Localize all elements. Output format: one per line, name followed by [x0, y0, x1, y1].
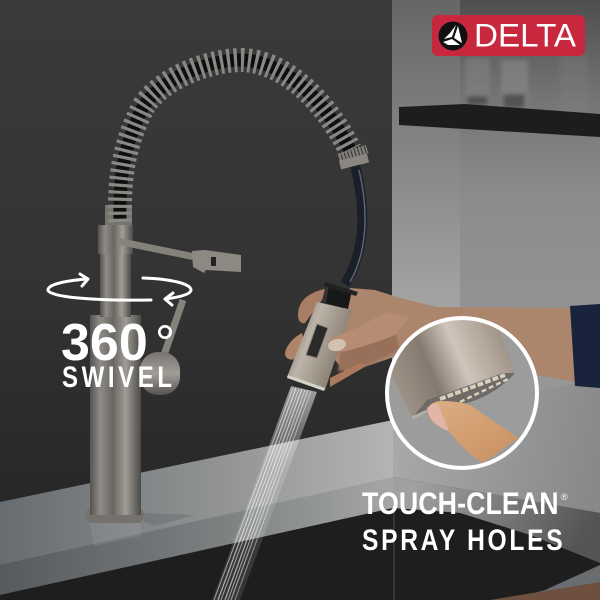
- pull-down spray head: [287, 282, 358, 391]
- countertop: [0, 378, 600, 595]
- sink basin: [0, 508, 600, 600]
- sleeve cuff: [570, 304, 600, 388]
- 360 degree heading: 360: [61, 314, 148, 372]
- thumb on spray head: [327, 312, 410, 353]
- 360 degree heading: °: [155, 315, 175, 371]
- background: dark wall: [0, 0, 393, 530]
- shelf with glasses: [399, 55, 600, 137]
- water spray: [212, 386, 317, 600]
- touch-clean label: ®: [561, 492, 568, 502]
- side arm holder: [117, 241, 241, 273]
- faucet body: [85, 205, 144, 523]
- Delta logo badge: DELTA: [474, 18, 577, 54]
- touch-clean label: TOUCH-CLEAN: [362, 487, 559, 522]
- Delta logo badge: [432, 15, 585, 56]
- callout circle: touch-clean detail: [387, 305, 537, 468]
- spray holes label: SPRAY HOLES: [362, 523, 565, 557]
- swivel label: SWIVEL: [62, 359, 176, 394]
- swivel rotation arrows: [48, 274, 191, 305]
- background: right wall: [392, 0, 600, 430]
- spring coil spout: [120, 60, 368, 222]
- hand and arm: [285, 288, 576, 387]
- flexible black hose: [345, 165, 365, 284]
- side handle lever: [140, 300, 183, 395]
